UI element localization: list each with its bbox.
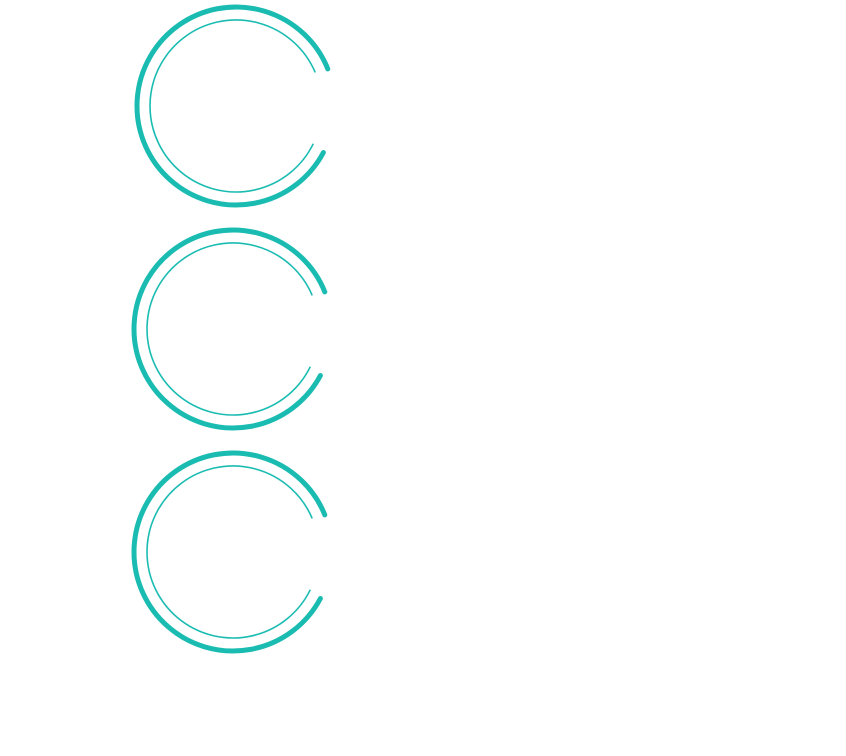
ring 2 — [134, 230, 325, 428]
ring 1 — [137, 7, 328, 205]
ring 3 — [134, 453, 325, 651]
